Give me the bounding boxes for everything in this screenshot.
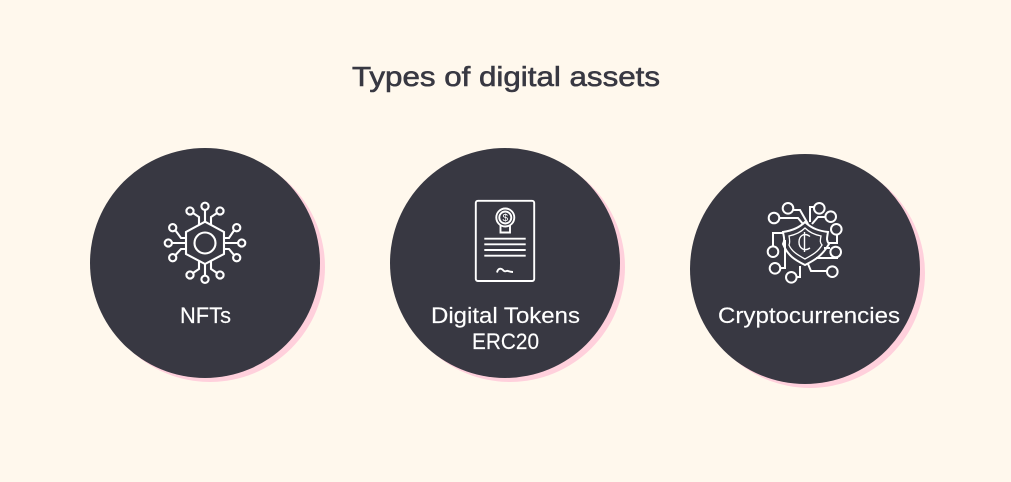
circle: NFTs <box>90 148 320 378</box>
icon: certificate document <box>476 201 534 281</box>
label: Cryptocurrencies: Cryptocurrencies <box>718 303 900 328</box>
title: Types of digital assets <box>352 61 660 92</box>
circle: Digital Tokens <box>390 148 620 378</box>
label line two: ERC20 <box>472 329 539 354</box>
label: NFTs: NFTs <box>180 303 231 328</box>
circle shadow: Cryptocurrencies <box>695 158 925 388</box>
circle: Cryptocurrencies <box>690 154 920 384</box>
icon: NFT hexagon network <box>165 203 245 283</box>
panel: Cryptocurrencies <box>690 154 925 388</box>
panel: Digital Tokens ERC20 <box>390 148 625 382</box>
currency mark on medal: $ <box>503 213 509 224</box>
label: Digital Tokens ERC20: Digital Tokens <box>431 303 580 328</box>
panel: NFTs <box>90 148 325 382</box>
circle shadow: Digital Tokens <box>395 152 625 382</box>
icon: crypto shield network <box>768 203 842 283</box>
circle shadow: NFTs <box>95 152 325 382</box>
